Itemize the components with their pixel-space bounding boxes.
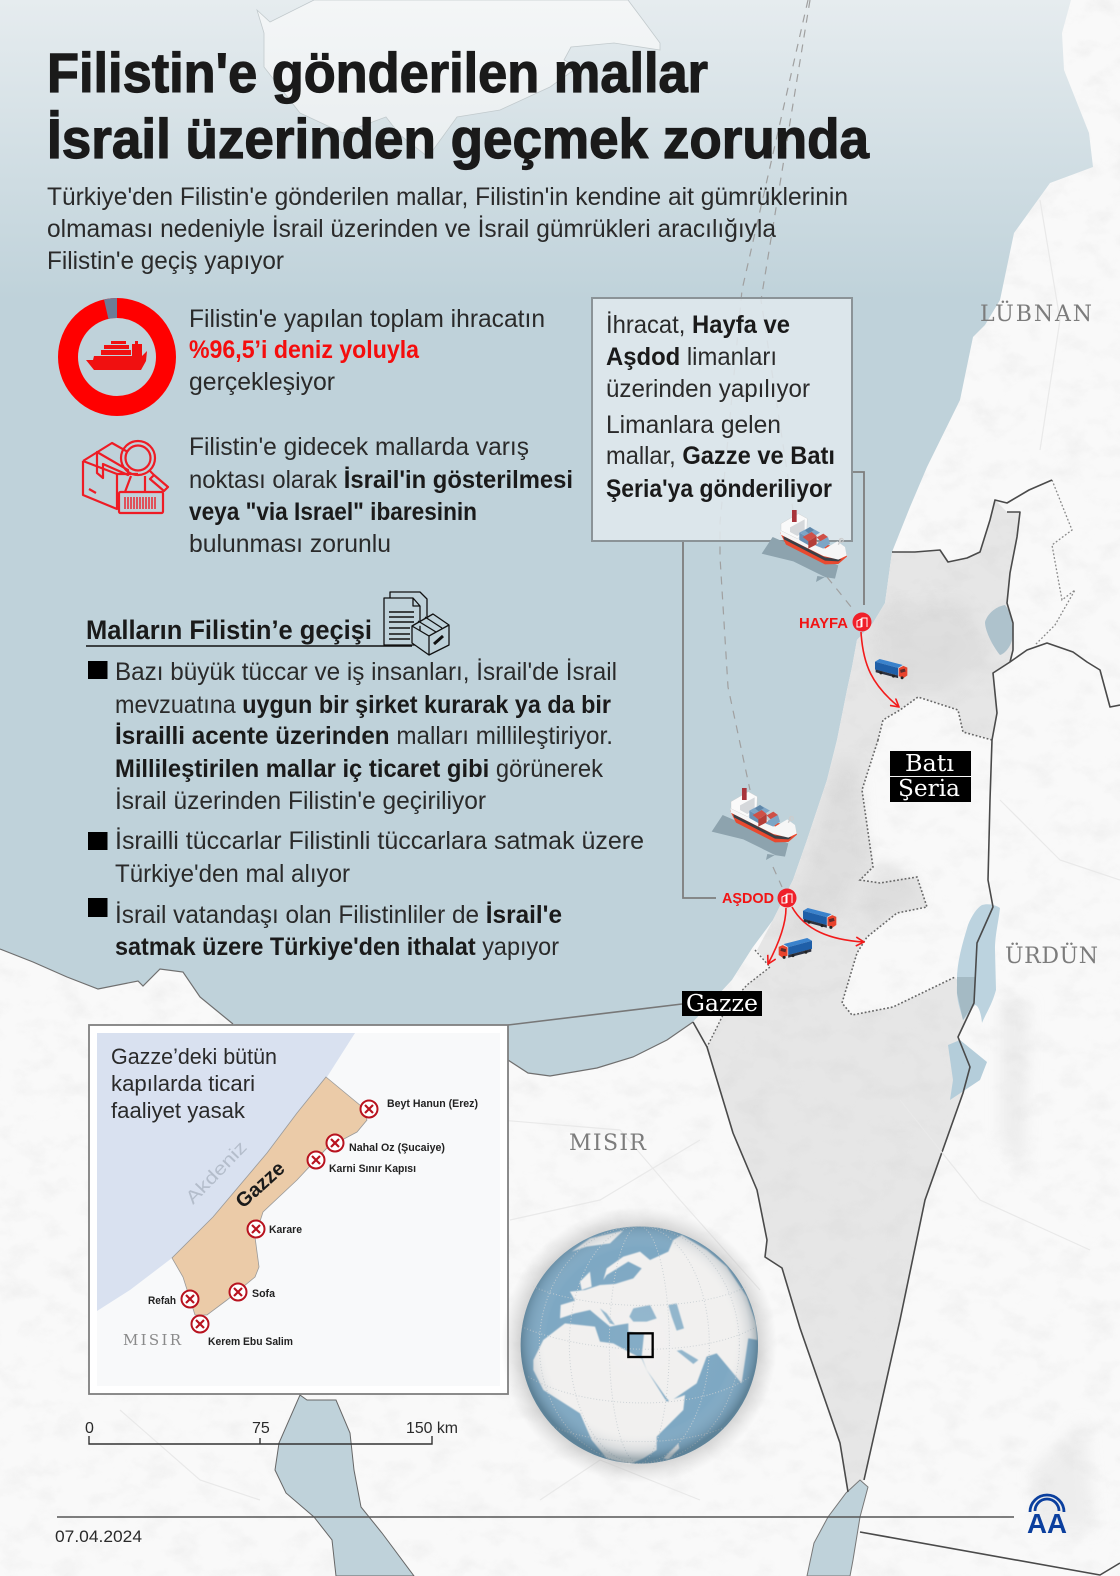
icon: documents and box [384,592,449,655]
stat text: sea share: Filistin'e yapılan toplam ihracatın [189,305,545,333]
bullet 1: Millileştirilen mallar iç ticaret gibi görünerek [115,755,603,783]
inset title [111,1044,277,1123]
label: Gaza: Gazze [686,991,758,1017]
truck: Ashdod south [779,938,812,959]
globe [501,1207,777,1483]
Dead Sea south basins [948,1040,987,1100]
inset title: faaliyet yasak [111,1098,246,1123]
subtitle: olmaması nedeniyle İsrail üzerinden ve İsrail gümrükleri aracılığıyla [47,214,776,243]
marker: Ashdod port: AŞDOD [722,890,774,907]
stat text: via Israel: bulunması zorunlu [189,530,391,558]
crossing: Sofa: Sofa [252,1288,276,1300]
icon: cargo ship [86,341,147,370]
label: Egypt inset: MISIR [123,1331,182,1349]
crossing: Kerem Ebu Salim [192,1316,293,1348]
panel: ports [592,298,852,541]
crossing: Sofa [230,1284,276,1300]
Cyprus [257,0,660,157]
globe locator box [628,1333,653,1357]
scale bar: 0 [85,1420,94,1437]
Sinai coast outline [0,949,693,1076]
crossing: Refah [148,1290,198,1308]
stat text: sea share: gerçekleşiyor [189,368,335,396]
crossing: Karare [248,1220,302,1238]
subtitle [47,183,848,275]
crossing: Kerem Ebu Salim: Kerem Ebu Salim [208,1336,293,1348]
bullet 1: İsrail üzerinden Filistin'e geçiriliyor [115,786,486,815]
Gaza strip shape [172,1077,367,1315]
arrow: Haifa to West Bank [861,632,899,707]
stat text: via Israel: veya "via Israel" ibaresinin [189,498,477,526]
Gaza strip on main map [693,947,770,1047]
truck: Haifa [875,659,907,679]
crossing: Refah: Refah [148,1295,176,1307]
bullet 2: İsrailli tüccarlar Filistinli tüccarlara satmak üzere [115,826,644,855]
bullet 1: İsrailli acente üzerinden malları millileştiriyor. [115,722,613,750]
panel: ports: üzerinden yapılıyor [606,375,810,403]
Borders [693,480,1120,1575]
Faint wadi lines [120,200,1120,1500]
bullet 1 [88,657,617,815]
Gaza dotted border [707,950,770,1047]
Eastern rift terrain [1004,1004,1090,1526]
ship: Ashdod [712,788,797,860]
bullet 2: Türkiye'den mal alıyor [115,860,350,888]
inset title: Gazze’deki bütün [111,1044,277,1069]
leader: Gaza label to inset [508,1004,682,1025]
dashed ship route Ashdod [720,0,808,887]
crossing: Karare: Karare [269,1224,302,1236]
stat text: sea share: %96,5’i deniz yoluyla [189,336,420,364]
Golan dotted line [1035,480,1075,645]
panel: ports: Şeria'ya gönderiliyor [606,475,832,503]
land texture [66,6,1107,1275]
label: West Bank: Batı [905,751,954,777]
title: Filistin'e gönderilen mallar [47,41,708,104]
stat text: sea share [189,305,545,396]
marker: Haifa port: HAYFA [799,615,848,632]
panel: Gaza inset map [89,1025,508,1394]
stat text: via Israel [189,433,573,558]
marker: Ashdod port [722,888,796,908]
title [47,41,870,170]
bullet 3: İsrail vatandaşı olan Filistinliler de İsrail'e [115,900,562,929]
stat text: via Israel: Filistin'e gidecek mallarda varış [189,433,529,461]
label: Gaza rotated: Gazze [232,1158,289,1213]
globe land [533,1231,757,1464]
Sea of Galilee [985,605,1013,655]
bullet 1: mevzuatına uygun bir şirket kurarak ya da bir [115,691,611,719]
logo: AA [1027,1495,1067,1539]
label: Egypt: MISIR [569,1131,647,1156]
label: Mediterranean: Akdeniz [181,1137,251,1208]
globe inland seas [600,1303,698,1364]
Dead Sea [957,904,1000,1023]
bullet 3 [88,898,562,961]
arrow: Ashdod to Gaza [768,908,786,964]
panel: ports: mallar, Gazze ve Batı [606,442,835,470]
scale bar: 75 [252,1420,270,1437]
scale bar [85,1420,458,1444]
bullet 3: satmak üzere Türkiye'den ithalat yapıyor [115,933,559,961]
stat text: via Israel: noktası olarak İsrail'in gösterilmesi [189,466,573,494]
label: Jordan: ÜRDÜN [1005,942,1098,969]
panel: ports: Limanlara gelen [606,411,781,439]
label: West Bank [890,751,971,802]
crossing: Beyt Hanun [360,1098,478,1118]
bullet 2 [88,826,644,888]
panel: ports: İhracat, Hayfa ve [606,310,790,339]
West Bank dotted border [842,697,992,1015]
arrow: Ashdod to West Bank [792,907,864,942]
sea top fade [0,0,1120,300]
Dead Sea darker west basin [957,977,975,1020]
subtitle: Filistin'e geçiş yapıyor [47,247,284,275]
crossing: Beyt Hanun: Beyt Hanun (Erez) [387,1098,478,1110]
logo: AA: AA [1027,1508,1067,1539]
title: İsrail üzerinden geçmek zorunda [47,107,870,170]
crossing: Nahal Oz: Nahal Oz (Şucaiye) [349,1142,445,1154]
Coastal plain and hills, soft darker tone [798,613,973,928]
ship: Haifa [762,510,847,582]
label: West Bank: Şeria [898,776,960,802]
Gulf of Suez [275,1395,414,1576]
marker: Haifa port [799,612,872,632]
date: 07.04.2024 [55,1528,142,1546]
crossing: Nahal Oz [326,1134,445,1154]
crossing: Karni: Karni Sınır Kapısı [329,1163,416,1175]
inset sea [97,1033,355,1311]
section heading: Malların Filistin’e geçişi [86,615,372,645]
bullet list [88,657,644,961]
connector lines from port panel [683,472,864,898]
donut chart: 96.5% sea [68,298,166,406]
crossing: Karni [308,1152,416,1175]
subtitle: Türkiye'den Filistin'e gönderilen mallar, Filistin'in kendine ait gümrüklerinin [47,183,848,211]
label: Lebanon: LÜBNAN [980,300,1092,327]
globe graticule [522,1226,757,1464]
bullet 1: Bazı büyük tüccar ve iş insanları, İsrail'de İsrail [115,657,617,686]
truck: Ashdod east [803,908,836,929]
footer rule [57,1516,1014,1518]
Israel shaded area [707,500,1020,1492]
Gulf of Aqaba [807,1480,868,1576]
panel: ports: Aşdod limanları [606,343,777,371]
inset title: kapılarda ticari [111,1071,255,1096]
dashed ship route Haifa [761,0,852,608]
scale bar: 150 km [406,1420,458,1437]
icon: box with magnifier and barcode [83,441,168,513]
